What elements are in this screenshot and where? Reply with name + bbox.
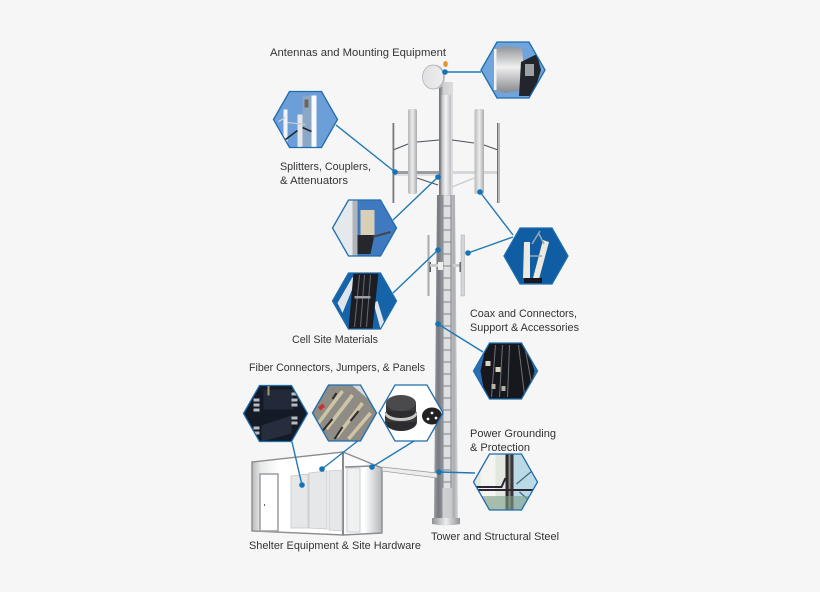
hexagon: fiber jumpers photo bbox=[312, 384, 378, 442]
hexagon: splitter box photo bbox=[332, 199, 398, 257]
door bbox=[260, 474, 278, 531]
hexagon: panel antennas photo bbox=[272, 90, 338, 150]
hexagon: grommet photo bbox=[378, 384, 444, 442]
shelter building bbox=[252, 452, 382, 535]
label: shelter equipment: Shelter Equipment & Site Hardware bbox=[249, 540, 421, 552]
equipment panels bbox=[291, 468, 360, 532]
mid antenna pair bbox=[428, 235, 464, 296]
connector lines bbox=[292, 72, 513, 485]
hexagon: cell site cables photo bbox=[332, 272, 398, 330]
beacon bbox=[443, 61, 448, 67]
tower bbox=[432, 82, 460, 526]
label: power grounding bbox=[470, 428, 556, 454]
label: cell site materials: Cell Site Materials bbox=[292, 334, 378, 346]
label: power grounding: & Protection bbox=[470, 442, 530, 454]
label: coax and connectors: Coax and Connectors, bbox=[470, 308, 577, 320]
hexagon: coax cables photo bbox=[472, 342, 538, 400]
hexagon: dual antenna photo bbox=[503, 227, 569, 285]
struts bbox=[393, 140, 498, 185]
label: splitters, couplers and attenuators bbox=[280, 161, 371, 187]
top antenna array bbox=[392, 109, 500, 203]
label: coax and connectors bbox=[470, 308, 579, 334]
hexagon: grounding photo bbox=[472, 453, 538, 511]
label: splitters, couplers and attenuators: Splitters, Couplers, bbox=[280, 161, 371, 173]
ladder bbox=[443, 195, 451, 488]
label: coax and connectors: Support & Accessories bbox=[470, 322, 579, 334]
label: fiber connectors: Fiber Connectors, Jumpers, & Panels bbox=[249, 362, 425, 374]
hexagon: dish photo bbox=[480, 41, 546, 99]
label: tower and structural steel: Tower and Structural Steel bbox=[431, 531, 559, 543]
hexagon: fiber panel photo bbox=[242, 384, 308, 442]
label: power grounding: Power Grounding bbox=[470, 428, 556, 440]
conduit bbox=[382, 467, 437, 478]
title: antennas and mounting equipment: Antennas and Mounting Equipment bbox=[270, 47, 446, 59]
label: splitters, couplers and attenuators: & Attenuators bbox=[280, 175, 349, 187]
infographic: cell tower components bbox=[242, 41, 579, 552]
dish antenna bbox=[422, 65, 445, 89]
tower base bbox=[432, 518, 460, 526]
connector dots bbox=[299, 69, 483, 488]
